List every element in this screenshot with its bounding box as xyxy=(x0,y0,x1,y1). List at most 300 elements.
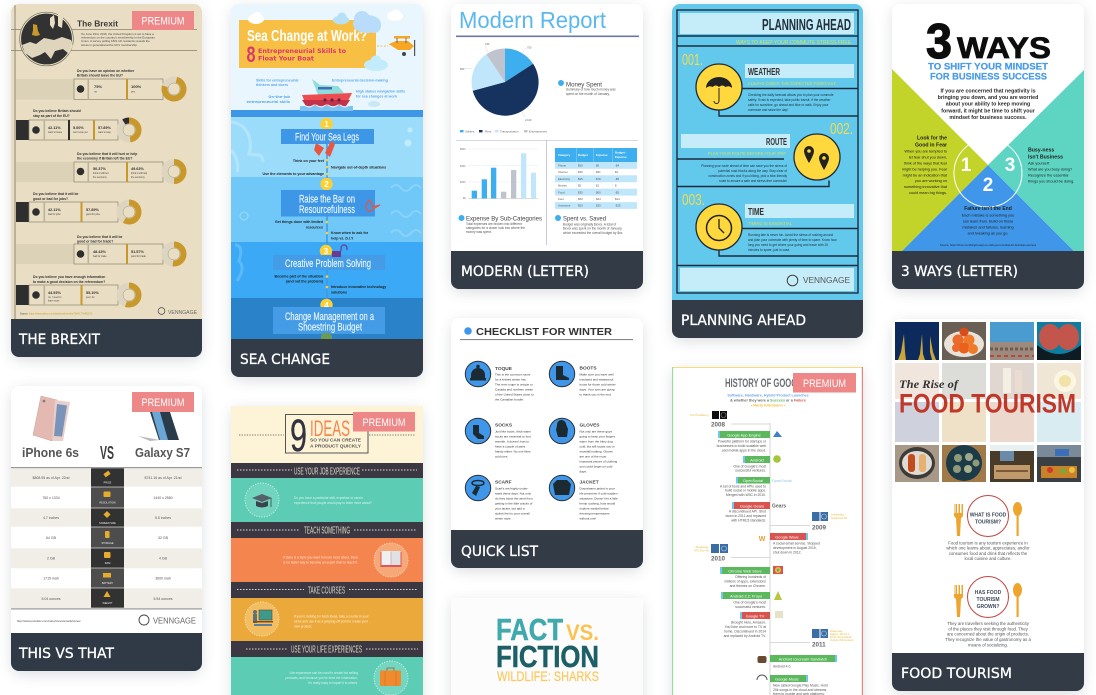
row: information question: Do you believe you have enough information xyxy=(33,275,105,279)
milestone: 2008 xyxy=(690,411,770,428)
row: trade question: 48.43% xyxy=(93,250,107,254)
item: gloves: you could forget on cold xyxy=(580,464,613,468)
item: Android: successful ventures. xyxy=(735,468,766,472)
table: spent vs saved: $50 xyxy=(578,197,583,201)
row: jobs question: Do you believe that it will be xyxy=(33,192,79,196)
table: spent vs saved: $35 xyxy=(578,177,583,181)
step 4: Change Management on a xyxy=(285,311,375,323)
section: time: Running late is never fun. Avoid the stress of rushing around xyxy=(748,233,833,237)
text: skill labels xyxy=(246,78,405,104)
image: Galaxy S7 xyxy=(138,412,179,441)
item: socks: Just like boots, thick warm xyxy=(495,430,532,434)
item: Android 2.2 Froyo: successful ventures. xyxy=(735,605,766,609)
milestone: 2011: Verizon Wifi Hotspot xyxy=(830,638,854,642)
text block: intro: mindset for business success. xyxy=(949,115,1027,121)
section: teach xyxy=(283,543,408,577)
item: scarf: stylish feel to your overall xyxy=(495,512,530,516)
item: Android 2.2 Froyo: Android 2.2: Froyo xyxy=(730,594,762,598)
heading: 9 Ideas: SO YOU CAN CREATE xyxy=(310,438,361,442)
row: opinion question xyxy=(16,69,186,102)
card: Food Tourism xyxy=(892,319,1084,691)
item: boots: to thank you in the end. xyxy=(580,392,612,396)
item: OpenSocial: OpenSocial xyxy=(772,479,792,483)
item: Chrome Web Store: millions of apps, extensions xyxy=(725,580,766,584)
table: spent vs saved: $30 xyxy=(578,170,583,174)
item: Google Wave: development in August 2010, xyxy=(773,546,817,550)
step 3: Become part of the situation xyxy=(274,274,323,278)
item: Chrome Web Store: Offering hundreds of xyxy=(735,575,766,579)
pie chart: money spent: 430 xyxy=(485,42,490,46)
heading: checklist for winter xyxy=(460,327,633,340)
item: toque: The term toque is unique to xyxy=(495,382,533,386)
item: socks: cold toes. xyxy=(495,454,508,458)
step 3: solutions xyxy=(331,290,347,294)
milestone: 2010: 2010 xyxy=(711,556,726,562)
step 2: Get things done with limited xyxy=(275,220,323,224)
item: jacket: without one! xyxy=(580,516,596,520)
section: time xyxy=(682,192,837,252)
text: failure: Failure isn't the End xyxy=(964,206,1012,212)
row: jobs question: bad for jobs xyxy=(48,213,61,216)
step 3: Creative Problem Solving xyxy=(285,258,371,270)
row: information question: 55.10% xyxy=(86,291,100,295)
item: Google Music: 20k songs in the cloud and streams xyxy=(773,688,827,692)
text: look for the good in fear: might be an indication that xyxy=(903,174,948,178)
milestone: 2009: 2009 xyxy=(812,524,827,532)
card: Fact vs Fiction xyxy=(451,598,643,695)
card label: Sea Change xyxy=(231,339,423,377)
row: economy question: 50.37% xyxy=(93,167,107,171)
heading: history of Google: Software, Hardware, Hybrid Product Launches xyxy=(727,394,809,398)
card label: Food Tourism xyxy=(892,653,1084,691)
heading: fact vs fiction: FICTION xyxy=(496,639,599,674)
heading: The Brexit: The Brexit xyxy=(77,18,118,28)
banner: title: Entrepreneurial Skills to xyxy=(258,48,346,55)
callout: expense by sub-categories: money was spent. xyxy=(466,230,492,234)
section: weather: WEATHER xyxy=(748,66,780,78)
comparison table: 64 GB xyxy=(46,536,57,540)
bar chart: expenses xyxy=(460,148,538,200)
subheading xyxy=(928,62,1049,82)
item: OpenSocial: OpenSocial xyxy=(743,478,763,483)
shape: left green triangle xyxy=(892,69,988,251)
item: Chrome Web Store: and themes on Chrome. xyxy=(730,584,766,588)
callout: money spent: Summary of how much money was xyxy=(566,88,616,92)
heading: fact vs fiction: FACT xyxy=(496,612,563,647)
item: boots xyxy=(549,361,616,396)
shape: bottom blue triangle xyxy=(902,165,1074,251)
section: time: minutes to spare, just in case. xyxy=(748,248,790,252)
text: busy-ness: Recognize the essential xyxy=(1028,174,1068,178)
row: stay or leave question: Do you believe Britain should xyxy=(33,109,81,113)
item: Google App Engine: Google App Engine xyxy=(727,432,761,438)
step 3: (and not the problem) xyxy=(286,280,324,284)
item: Google Gears xyxy=(726,502,786,522)
section: job experience: Do you have a particular skill, expertise or career xyxy=(294,496,364,500)
item: scarf: getting in the little cracks of xyxy=(495,502,532,506)
item: Google App Engine: and mobile apps in the cloud. xyxy=(722,448,766,452)
comparison table: SCREEN SIZE xyxy=(99,522,116,525)
item: toque: the Canadian border. xyxy=(495,398,524,402)
item: scarf xyxy=(465,475,533,520)
text: look for the good in fear: think of the ways that fear xyxy=(904,162,948,166)
text: look for the good in fear: might be helping you. Fear xyxy=(902,168,948,172)
section: time: TIME xyxy=(748,206,764,218)
table: spent vs saved: Internet xyxy=(558,170,568,174)
section: what is food tourism: consumes food and drink that reflects the xyxy=(949,551,1028,556)
item: gloves: Not only are these guys xyxy=(580,430,612,434)
text: failure: and tweaking as you go. xyxy=(968,232,1008,236)
banner: title: Sea Change at Work? xyxy=(247,28,367,45)
item: gloves: GLOVES xyxy=(580,422,600,428)
item: Google Wave xyxy=(759,533,820,554)
item: Google Gears: Google Gears xyxy=(740,504,764,508)
card: 3 Ways xyxy=(892,4,1084,289)
item: Google Music xyxy=(757,675,828,695)
heading: food tourism xyxy=(899,379,1076,418)
badge: premium: PREMIUM xyxy=(803,378,846,390)
section header: teach something: TEACH SOMETHING xyxy=(304,526,350,536)
comparison table: 4.7 inches xyxy=(43,516,59,520)
item: OpenSocial: Merged with W3C in 2010. xyxy=(726,493,766,497)
section: weather: safely. If rain is expected, take public transit. If the weather xyxy=(748,98,831,102)
row: economy question xyxy=(16,152,186,184)
step 4 xyxy=(273,299,385,339)
section: what is food tourism: WHAT IS FOOD xyxy=(970,512,1007,518)
item: OpenSocial: build social or mobile apps. xyxy=(725,488,766,492)
text block: intro xyxy=(81,32,155,47)
heading: 3 Ways: 3 xyxy=(926,15,952,69)
item: Google Gears: A discontinued API. Shut xyxy=(729,510,766,514)
item: Google Gears: Gears xyxy=(772,504,786,510)
heading: 3 Ways xyxy=(926,15,1051,69)
item: toque: of the United States close to xyxy=(495,392,534,396)
section: courses: If you're looking for fresh ideas, take a course in your xyxy=(294,614,370,618)
text: failure xyxy=(940,206,1037,247)
heading: fact vs fiction: WILDLIFE: SHARKS xyxy=(497,669,599,684)
row: economy question: 49.63% xyxy=(131,167,145,171)
section: route: PLAN YOUR ROUTE BEFORE YOUR TRIP xyxy=(708,151,786,156)
section: what is food tourism: TOURISM? xyxy=(975,520,1001,526)
section: has food tourism grown: TOURISM xyxy=(977,597,999,603)
item: gloves: going to keep your fingers xyxy=(580,434,616,438)
table: spent vs saved: Phone xyxy=(558,164,567,168)
table: spent vs saved: $ xyxy=(615,184,617,188)
item: socks: socks are essential to foot xyxy=(495,434,531,438)
row: information question: no, I need to xyxy=(48,296,62,299)
text: look for the good in fear: Good in Fear xyxy=(915,142,947,148)
section header: use your job experience: USE YOUR JOB EXPERIENCE xyxy=(294,466,360,478)
circle with numerals: 2 xyxy=(983,175,993,196)
comparison table: 32 GB xyxy=(158,536,169,540)
bar chart: expenses: $200 xyxy=(460,181,466,184)
item: Android Icecream Sandwich: Android Icecream Sandwich xyxy=(779,656,827,662)
section: has food tourism grown: They are travellers seeking the authenticity xyxy=(947,621,1030,626)
card label: Sea Change: SEA CHANGE xyxy=(240,352,330,368)
text: busy-ness: Isn't Business xyxy=(1028,154,1063,160)
comparison table: RESOLUTION xyxy=(99,502,116,504)
item: socks xyxy=(465,418,532,458)
icon: ship xyxy=(300,79,353,111)
card label: Quick List: QUICK LIST xyxy=(461,544,538,560)
card: The Brexit xyxy=(11,4,202,357)
comparison table: RAM xyxy=(105,562,110,565)
comparison table: 3600 mah xyxy=(155,576,171,580)
callout: spent vs saved: $xxxx was spent on the month of January, xyxy=(563,226,622,230)
row: economy question: think it will hurt xyxy=(93,172,109,175)
comparison table: PRICE xyxy=(104,482,112,484)
text block: intro: bringing you down, and you are worried xyxy=(938,95,1038,101)
callout: expense by sub-categories: categories for a closer look into where the xyxy=(466,226,525,230)
source line: http://www.pricelisto.com/cell-phones/smartphones/ xyxy=(17,619,81,623)
section: time: and plan your commute with plenty of time to spare. Know how xyxy=(748,238,837,242)
step 3 xyxy=(273,245,386,294)
comparison table: WEIGHT xyxy=(102,602,113,605)
row: stay or leave question: won't vote yet xyxy=(73,131,88,134)
heading: fact vs fiction: VS. xyxy=(566,620,599,645)
callout: spent vs saved: Spent vs. Saved xyxy=(563,216,607,222)
table: spent vs saved: -$5 xyxy=(615,177,619,181)
text block: intro: Union. A survey polling 1821 UK residents reveals the xyxy=(81,39,150,43)
banner: title xyxy=(239,20,376,68)
row: information question: yes I do xyxy=(86,296,95,299)
section: has food tourism grown: are concerned about the origin of products. xyxy=(947,632,1029,636)
card label: Modern: MODERN (LETTER) xyxy=(461,264,589,280)
comparison table: 2 GB xyxy=(47,556,56,560)
section: life experience: products, and because you've lived the information, xyxy=(285,676,358,680)
heading: 9 Ideas: IDEAS xyxy=(310,416,350,441)
table: spent vs saved: Electricity xyxy=(558,177,571,181)
item: gloves: cold, but will locate you in xyxy=(580,444,615,448)
milestone: 2011: Wi-Fi Chromebook xyxy=(830,635,852,639)
section: route: Planning your route ahead of time can save you the stress of xyxy=(701,164,787,168)
row: information question: learn more xyxy=(48,300,60,302)
item: Google Wave: A social email service. Stopped xyxy=(773,542,820,546)
item: Android Icecream Sandwich xyxy=(758,655,837,668)
photo grid: top row xyxy=(895,322,1081,360)
subheading: WAYS TO KEEP YOUR COMMUTE STRESS FREE xyxy=(736,40,852,46)
card label: The Brexit xyxy=(11,319,202,357)
table: spent vs saved xyxy=(555,148,637,209)
milestone: 2011: Dreamway, xyxy=(830,629,843,633)
comparison table: 5.5 inches xyxy=(155,516,171,520)
item: Android Icecream Sandwich: Android 4.0. xyxy=(773,664,791,668)
text: busy-ness: What are you busy doing? xyxy=(1028,168,1072,172)
item: scarf: rated these days. Not only xyxy=(495,492,531,496)
row: trade question: 51.57% xyxy=(131,250,145,254)
text: skill labels: High stakes navigation skills xyxy=(356,90,405,94)
row: trade question: Do you believe that it will be xyxy=(77,235,123,239)
table: spent vs saved: $6 xyxy=(596,164,600,168)
row: stay or leave question: 5.00% xyxy=(73,126,84,130)
text: skill labels: On-the-job xyxy=(268,95,290,99)
item: boots: BOOTS xyxy=(580,366,597,372)
text block: intro xyxy=(938,88,1038,121)
milestone: 2008: The Presidency xyxy=(690,413,709,417)
table: spent vs saved: -$4 xyxy=(615,164,619,168)
item: Chrome Web Store: Chrome Web Store xyxy=(728,568,762,574)
table: spent vs saved: Expense xyxy=(596,153,608,157)
section: life experience: it's really easy to impart it to others. xyxy=(308,681,358,685)
item: scarf: winter style. xyxy=(495,516,511,520)
text: busy-ness: Busy-ness xyxy=(1028,148,1054,154)
row: stay or leave question: stay as part of the EU? xyxy=(33,114,70,118)
heading: history of Google: & whether they were a Success or a Failure xyxy=(730,398,806,402)
section: has food tourism grown: of the places they visit through food. They xyxy=(948,626,1029,632)
section: teach: is no faster way to become an expert than to teach it. xyxy=(283,560,358,564)
section: has food tourism grown: They recognize the value of gastronomy as a xyxy=(945,637,1031,642)
item: gloves: are one of the most xyxy=(580,454,606,458)
item: OpenSocial: A set of tools and APIs used to xyxy=(720,484,766,488)
step 2: Resourcefulness xyxy=(299,204,355,216)
section: courses: own product. xyxy=(294,624,312,628)
table: spent vs saved: $35 xyxy=(578,190,583,194)
item: Google TV: and replaced by Android TV. xyxy=(724,634,766,638)
step 1: Find Your Sea Legs xyxy=(295,132,359,144)
item: jacket: life preserver if cold-sudden xyxy=(580,492,618,496)
text: skill labels: for sea changes at work xyxy=(356,94,397,98)
item: boots: insulated and waterproof xyxy=(580,378,614,382)
table: spent vs saved: $44 xyxy=(596,197,601,201)
section: route: construction zones and if you biking, pick a bike-friendly xyxy=(708,174,787,178)
step 4: Shoestring Budget xyxy=(298,322,362,334)
card label: Food Tourism: FOOD TOURISM xyxy=(901,666,1012,682)
table: spent vs saved: Food xyxy=(558,190,565,194)
subheading: FOR BUSINESS SUCCESS xyxy=(930,72,1047,82)
text block: intro: On June 23rd, 2016, the United Kingdom is set to have a xyxy=(81,32,154,36)
step 4: 4 xyxy=(324,301,329,310)
banner: title: 8 xyxy=(246,42,256,67)
section: job experience: experience that people would pay to learn more about? xyxy=(294,501,372,505)
row: economy question: the economy xyxy=(131,176,145,179)
pie chart: money spent: 800 xyxy=(460,67,465,71)
logo: Venngage: VENNGAGE xyxy=(153,616,196,626)
item: socks: handy either. No one likes xyxy=(495,450,531,454)
bar chart: expenses: $0 xyxy=(463,197,466,200)
table: spent vs saved: $78 xyxy=(596,177,601,181)
milestone: 2009: HugFreed 3G xyxy=(831,516,847,520)
item: scarf: SCARF xyxy=(495,480,512,486)
item: Google Music: Google Music xyxy=(775,676,799,682)
comparison table: 1440 x 2560 xyxy=(153,496,173,500)
comparison table: STORAGE xyxy=(101,542,114,545)
section: what is food tourism: Food tourism is any tourism experience in xyxy=(948,540,1028,546)
circle with numerals: 1 xyxy=(961,155,972,176)
text: look for the good in fear: let fear shut you down, xyxy=(909,156,947,160)
callout: money spent xyxy=(558,80,616,96)
card: This vs That xyxy=(11,386,202,671)
section: life experience xyxy=(285,661,408,695)
step 1: Use the elements to your advantage xyxy=(262,172,324,176)
card label: Modern xyxy=(451,251,643,289)
row: jobs question: good or bad for jobs? xyxy=(33,197,68,201)
table: spent vs saved: Insurance xyxy=(558,204,571,208)
text: skill labels: entrepreneurial skills xyxy=(246,100,290,104)
text: look for the good in fear: Look for the xyxy=(917,136,947,142)
section: route xyxy=(701,121,853,183)
milestone: 2011: 2011 xyxy=(812,642,826,648)
card: Planning Ahead xyxy=(672,4,863,338)
text: failure: Each mistake is something you xyxy=(962,214,1014,218)
item: Android 2.2 Froyo xyxy=(721,591,782,609)
row: information question: to make a good decision on the referendum? xyxy=(33,280,105,284)
icon: Europe map globe xyxy=(20,12,73,66)
table: spent vs saved: $50 xyxy=(578,164,583,168)
text: failure: mistakes and failures, learning xyxy=(962,226,1014,230)
text: look for the good in fear: something innovative that xyxy=(904,185,948,189)
table: spent vs saved: $50 xyxy=(578,204,583,208)
table: spent vs saved: Movies xyxy=(558,184,567,188)
section: time: TIMING IS ESSENTIAL xyxy=(748,221,792,226)
table: spent vs saved: $5 xyxy=(578,184,582,188)
item: Android: One of Google's most xyxy=(733,464,766,468)
text: look for the good in fear: could mean big things. xyxy=(909,191,947,195)
text: busy-ness: Ask yourself: xyxy=(1028,162,1050,166)
comparison table: $808.95 as of Apr. 22nd xyxy=(33,476,70,480)
text: skill labels: Skills for entrepreneurial xyxy=(256,78,298,82)
milestone: 2009: Dreamway, xyxy=(831,512,845,516)
heading: history of Google xyxy=(725,378,809,408)
step 1 xyxy=(262,118,386,176)
item: socks: warmth. It doesn't hurt to xyxy=(495,440,529,444)
comparison table: $741.16 as of Apr. 21nd xyxy=(145,476,182,480)
section: route: route to ensure a safe and stress-free commute! xyxy=(719,179,787,183)
section: has food tourism grown: HAS FOOD xyxy=(975,590,1002,596)
icon: clouds xyxy=(248,10,403,107)
step 1: Think on your feet xyxy=(293,159,325,163)
milestone: 2010: Dreamway, xyxy=(696,545,709,549)
item: Google Wave: shut down in 2012. xyxy=(773,550,802,554)
card: Quick List xyxy=(451,318,643,568)
milestone: 2010: HTC Evo 4G xyxy=(694,548,709,552)
item: gloves: days. xyxy=(580,470,587,474)
item: Google TV xyxy=(724,611,783,638)
subheading: TO SHIFT YOUR MINDSET xyxy=(928,62,1049,72)
timeline spine xyxy=(326,144,328,299)
callout: spent vs saved xyxy=(555,215,623,235)
table: spent vs saved: Budget xyxy=(578,153,588,157)
item: scarf: Scarf's are highly under- xyxy=(495,486,528,490)
section: weather: 001. xyxy=(682,52,703,69)
text block: intro: referendum on the country's membership in the European xyxy=(81,36,155,40)
headings: iPhone 6s xyxy=(22,446,79,460)
item: socks: SOCKS xyxy=(495,422,513,428)
badge: premium: PREMIUM xyxy=(142,397,184,409)
section: courses: niche and use it as a jumping-off point to create your xyxy=(294,620,369,624)
milestone: 2011: Galaxy, Tab 10.1 xyxy=(830,632,850,636)
section: weather: calls for sunshine, go ahead and bike or walk. Enjoy your xyxy=(748,103,829,107)
table: spent vs saved: $1 xyxy=(615,170,619,174)
item: scarf: your jacket, but add a xyxy=(495,506,525,510)
badge: premium: PREMIUM xyxy=(362,417,406,429)
row: trade question: good or bad for trade? xyxy=(77,240,113,244)
text: busy-ness xyxy=(1028,148,1074,184)
step 3: 3 xyxy=(324,247,329,256)
item: jacket xyxy=(549,475,618,520)
section: life experience: Life experience can be used to create hot selling xyxy=(290,671,358,675)
text: failure: Source: https://zbox.com/blog/3-ways-to-shift-your-mindset-for-business-success xyxy=(940,243,1037,247)
section: courses xyxy=(245,602,370,636)
table: spent vs saved: $1 xyxy=(596,184,600,188)
row: information question xyxy=(16,275,142,308)
item: jacket: hemp cooking, how would xyxy=(580,502,615,506)
section: route: ROUTE xyxy=(766,136,787,148)
logo: Venngage: VENNGAGE xyxy=(168,310,197,316)
card label: Planning Ahead: PLANNING AHEAD xyxy=(681,313,806,329)
step 2 xyxy=(275,178,380,240)
text: skill labels: Entrepreneurial decision-making xyxy=(332,78,388,82)
circle with numerals xyxy=(954,139,1022,207)
